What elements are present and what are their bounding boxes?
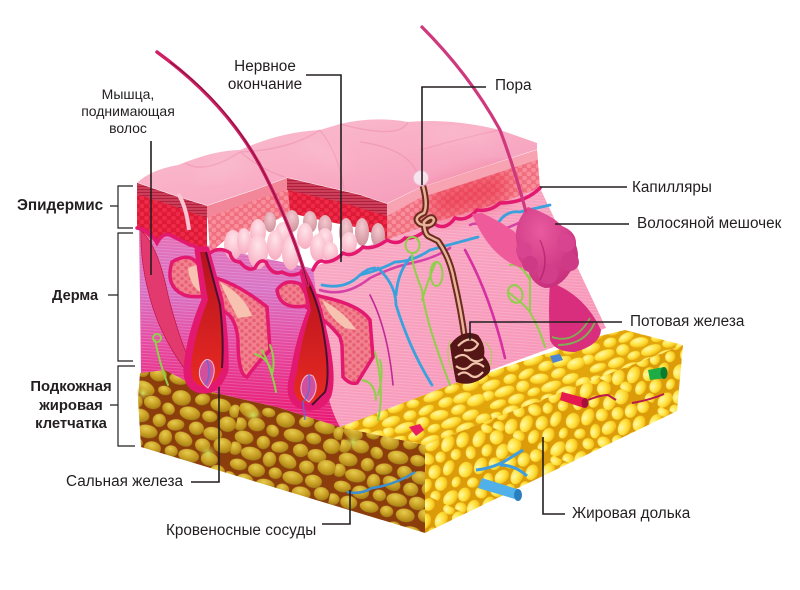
heading: epidermis: Эпидермис: [17, 197, 104, 214]
blood vessels: [320, 205, 550, 385]
label: nerve ending: Нервное: [234, 58, 296, 75]
sebaceous gland left: [170, 257, 270, 377]
subcutaneous fat: top surface: [340, 330, 683, 445]
pore: [414, 170, 428, 186]
label: sebaceous gland: Сальная железа: [66, 473, 183, 490]
nerve fibers: [153, 237, 545, 420]
leader: pore: [422, 87, 486, 185]
capillary line: [137, 188, 540, 275]
leader: fat lobule: [543, 437, 565, 514]
dermis: left face: [139, 228, 375, 427]
dermis: right face: [313, 188, 606, 427]
bracket: dermis: [108, 233, 133, 361]
heading: subcutaneous fat: жировая: [38, 398, 103, 414]
label: blood vessels: Кровеносные сосуды: [166, 522, 316, 539]
hair muscle right: [472, 213, 524, 268]
sweat duct: [417, 186, 465, 340]
label: capillaries: Капилляры: [632, 179, 712, 196]
dermal papillae: [224, 210, 385, 270]
label: muscle: волос: [109, 120, 147, 136]
label: hair follicle: Волосяной мешочек: [637, 215, 782, 232]
label: fat lobule: Жировая долька: [572, 505, 691, 522]
sweat duct highlight: [417, 186, 465, 340]
bracket: fat: [110, 366, 135, 446]
leader: sweat gland: [470, 322, 622, 340]
hair shaft: [157, 52, 308, 285]
label: muscle: Мышца,: [102, 86, 154, 102]
hair follicle sack with bulb: [421, 26, 601, 352]
heading: subcutaneous fat: клетчатка: [35, 416, 108, 432]
sebaceous gland right: [277, 282, 373, 383]
heading: subcutaneous fat: Подкожная: [30, 379, 112, 395]
hair shaft right: [421, 26, 526, 212]
subcutaneous fat: left face: [136, 370, 425, 533]
sweat gland: [448, 333, 492, 384]
subcutaneous fat: right face: [425, 345, 683, 533]
hair follicle right with long hair: [157, 52, 330, 420]
hair shaft in notch: [178, 194, 189, 230]
label: pore: Пора: [495, 77, 532, 94]
epidermis layers: [137, 150, 540, 257]
vessels in fat: [347, 354, 668, 501]
leader: blood vessels: [322, 490, 350, 524]
label: nerve ending: окончание: [228, 76, 302, 93]
skin surface: [137, 119, 537, 206]
hair follicle left: [178, 194, 225, 390]
leader: follicle: [555, 223, 629, 225]
leader: sebaceous gland: [191, 387, 219, 482]
leader: nerve ending: [306, 75, 341, 262]
heading: dermis: Дерма: [52, 288, 99, 304]
leader: muscle: [150, 141, 152, 275]
bracket: epidermis: [110, 186, 133, 228]
label: muscle: поднимающая: [81, 103, 175, 119]
arrector pili muscle: [141, 231, 190, 368]
label: sweat gland: Потовая железа: [630, 313, 745, 330]
leader: capillaries: [540, 186, 627, 188]
skin diagram: [136, 26, 683, 533]
